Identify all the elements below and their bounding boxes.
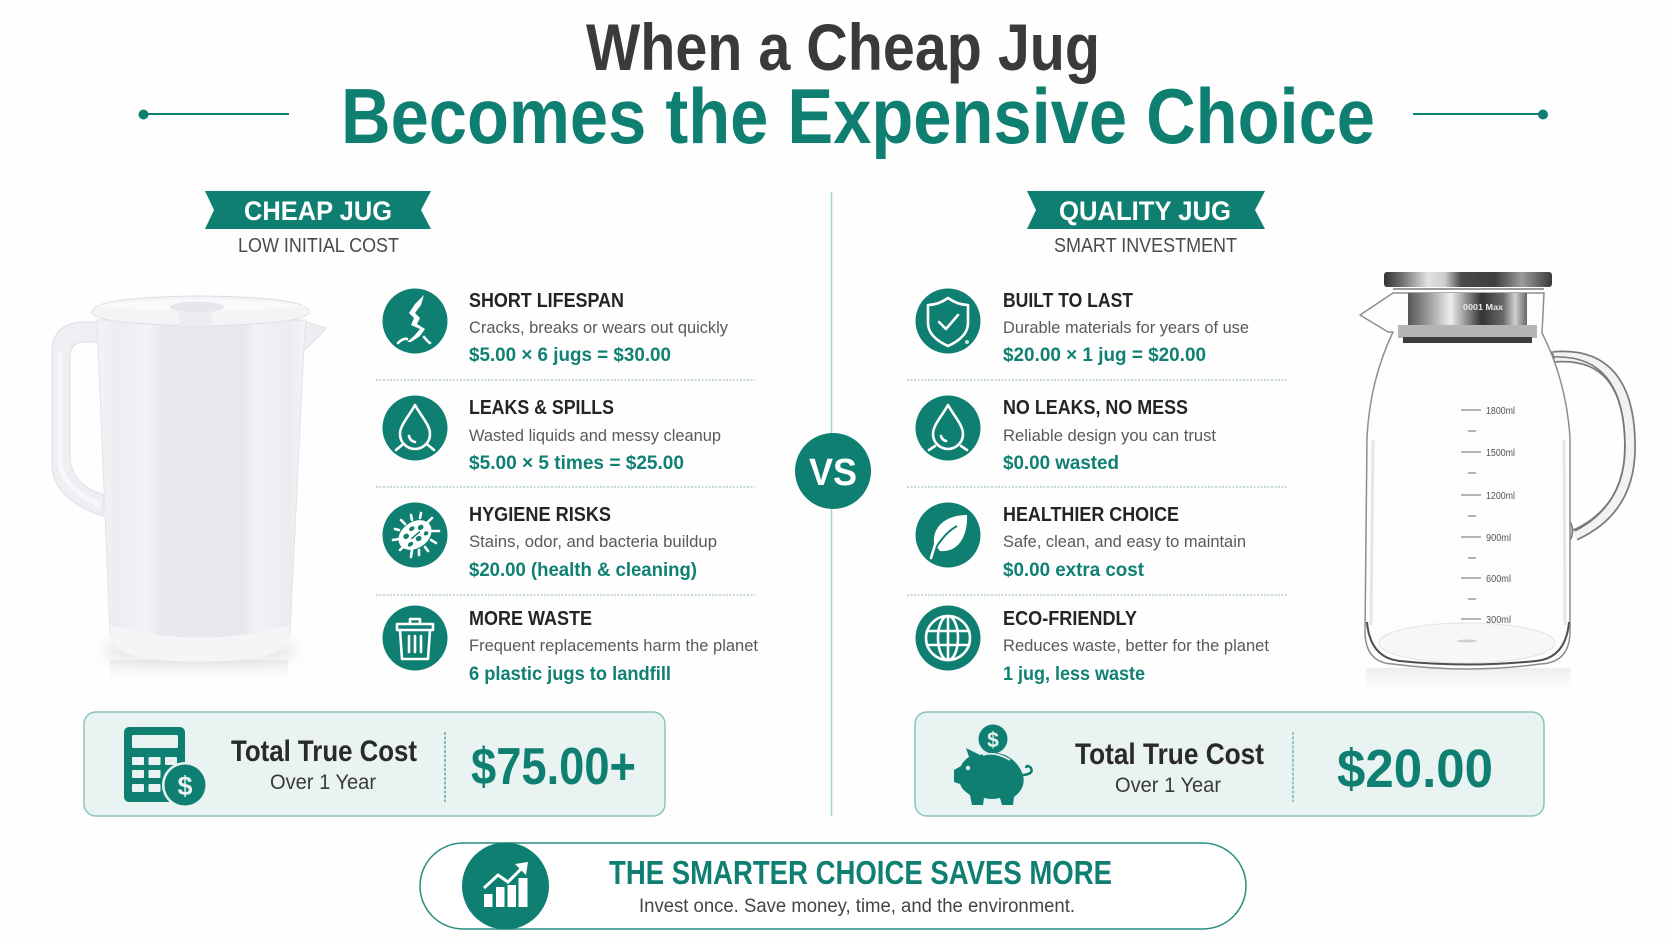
icon: bacteria bbox=[382, 502, 448, 568]
icon: piggy bank bbox=[954, 724, 1032, 805]
subheading: LOW INITIAL COST bbox=[238, 235, 399, 257]
description: Durable materials for years of use bbox=[1003, 318, 1249, 337]
row: hygiene risks bbox=[382, 502, 717, 581]
label: Total True Cost bbox=[231, 735, 417, 768]
label: Total True Cost bbox=[1075, 738, 1264, 771]
total value: $75.00+ bbox=[471, 738, 636, 796]
title line 1: When a Cheap Jug bbox=[586, 10, 1100, 84]
ribbon banner bbox=[1027, 191, 1265, 229]
period: Over 1 Year bbox=[270, 771, 376, 794]
metal lid bbox=[1384, 272, 1552, 287]
illustration: plastic jug bbox=[52, 296, 326, 690]
icon: globe bbox=[916, 606, 980, 670]
illustration: glass jug bbox=[1360, 272, 1630, 700]
VS badge bbox=[795, 433, 871, 509]
title ornament right bbox=[1413, 110, 1548, 120]
row: healthier choice bbox=[916, 502, 1246, 581]
cost: 6 plastic jugs to landfill bbox=[469, 663, 671, 685]
callout: smarter choice bbox=[420, 842, 1246, 930]
row: eco-friendly bbox=[916, 606, 1269, 685]
panel: quality jug total cost bbox=[915, 712, 1544, 816]
icon: piggy bank: $ bbox=[987, 729, 999, 752]
row heading: SHORT LIFESPAN bbox=[469, 290, 624, 312]
row heading: HYGIENE RISKS bbox=[469, 504, 611, 526]
heading: quality jug bbox=[1027, 191, 1265, 257]
icon: shield check bbox=[916, 288, 980, 354]
row: short lifespan bbox=[382, 288, 728, 366]
description: Reduces waste, better for the planet bbox=[1003, 636, 1269, 655]
description: Cracks, breaks or wears out quickly bbox=[469, 318, 728, 337]
heading: quality jug: QUALITY JUG bbox=[1059, 196, 1231, 226]
description: Reliable design you can trust bbox=[1003, 426, 1216, 445]
icon: droplet bbox=[916, 396, 980, 460]
VS badge: VS bbox=[809, 452, 857, 494]
description: Wasted liquids and messy cleanup bbox=[469, 426, 721, 445]
cost: $5.00 × 6 jugs = $30.00 bbox=[469, 344, 671, 366]
illustration: glass jug: 300ml bbox=[1486, 615, 1511, 626]
illustration: glass jug: 1200ml bbox=[1486, 491, 1515, 502]
illustration: glass jug: 1500ml bbox=[1486, 448, 1515, 459]
center divider line bbox=[830, 192, 832, 816]
heading: cheap jug bbox=[205, 191, 431, 257]
icon: leaf bbox=[916, 502, 980, 568]
ribbon banner bbox=[205, 191, 431, 229]
icon: crack bbox=[382, 288, 448, 354]
cost: $0.00 extra cost bbox=[1003, 559, 1144, 581]
subheading: SMART INVESTMENT bbox=[1054, 235, 1237, 257]
cost: 1 jug, less waste bbox=[1003, 663, 1145, 685]
illustration: glass jug: 900ml bbox=[1486, 533, 1511, 544]
cost: $20.00 × 1 jug = $20.00 bbox=[1003, 344, 1206, 366]
title ornament left bbox=[138, 110, 289, 120]
icon: calculator bbox=[124, 727, 208, 808]
icon: calculator: $ bbox=[177, 771, 193, 801]
row: more waste bbox=[382, 606, 758, 685]
description: Stains, odor, and bacteria buildup bbox=[469, 532, 717, 551]
row heading: NO LEAKS, NO MESS bbox=[1003, 397, 1188, 419]
icon: growth chart bbox=[462, 842, 549, 930]
row heading: HEALTHIER CHOICE bbox=[1003, 504, 1179, 526]
description: Safe, clean, and easy to maintain bbox=[1003, 532, 1246, 551]
row heading: ECO-FRIENDLY bbox=[1003, 608, 1138, 630]
title line 2: Becomes the Expensive Choice bbox=[341, 72, 1375, 160]
illustration: glass jug: 1800ml bbox=[1486, 406, 1515, 417]
measurement scale bbox=[1461, 410, 1481, 619]
row: no leaks no mess bbox=[916, 396, 1216, 474]
glass body bbox=[1360, 293, 1570, 669]
cost: $20.00 (health & cleaning) bbox=[469, 559, 697, 581]
row heading: LEAKS & SPILLS bbox=[469, 397, 614, 419]
heading: cheap jug: CHEAP JUG bbox=[244, 196, 392, 226]
callout heading: THE SMARTER CHOICE SAVES MORE bbox=[609, 854, 1112, 891]
row: leaks and spills bbox=[382, 396, 721, 474]
period: Over 1 Year bbox=[1115, 774, 1221, 797]
row heading: MORE WASTE bbox=[469, 608, 592, 630]
illustration: glass jug: 600ml bbox=[1486, 574, 1511, 585]
icon: trash can bbox=[382, 606, 448, 670]
callout text: Invest once. Save money, time, and the environment. bbox=[639, 896, 1075, 917]
row: built to last bbox=[916, 288, 1249, 366]
stainless plug bbox=[1408, 293, 1527, 326]
cost: $5.00 × 5 times = $25.00 bbox=[469, 452, 684, 474]
total value: $20.00 bbox=[1337, 739, 1493, 799]
icon: droplet bbox=[382, 396, 448, 460]
title bbox=[341, 10, 1375, 160]
description: Frequent replacements harm the planet bbox=[469, 636, 758, 655]
illustration: glass jug: 0001 Max bbox=[1463, 303, 1504, 312]
glass handle bbox=[1553, 357, 1630, 535]
panel: cheap jug total cost bbox=[84, 712, 665, 816]
row heading: BUILT TO LAST bbox=[1003, 290, 1133, 312]
cost: $0.00 wasted bbox=[1003, 452, 1119, 474]
